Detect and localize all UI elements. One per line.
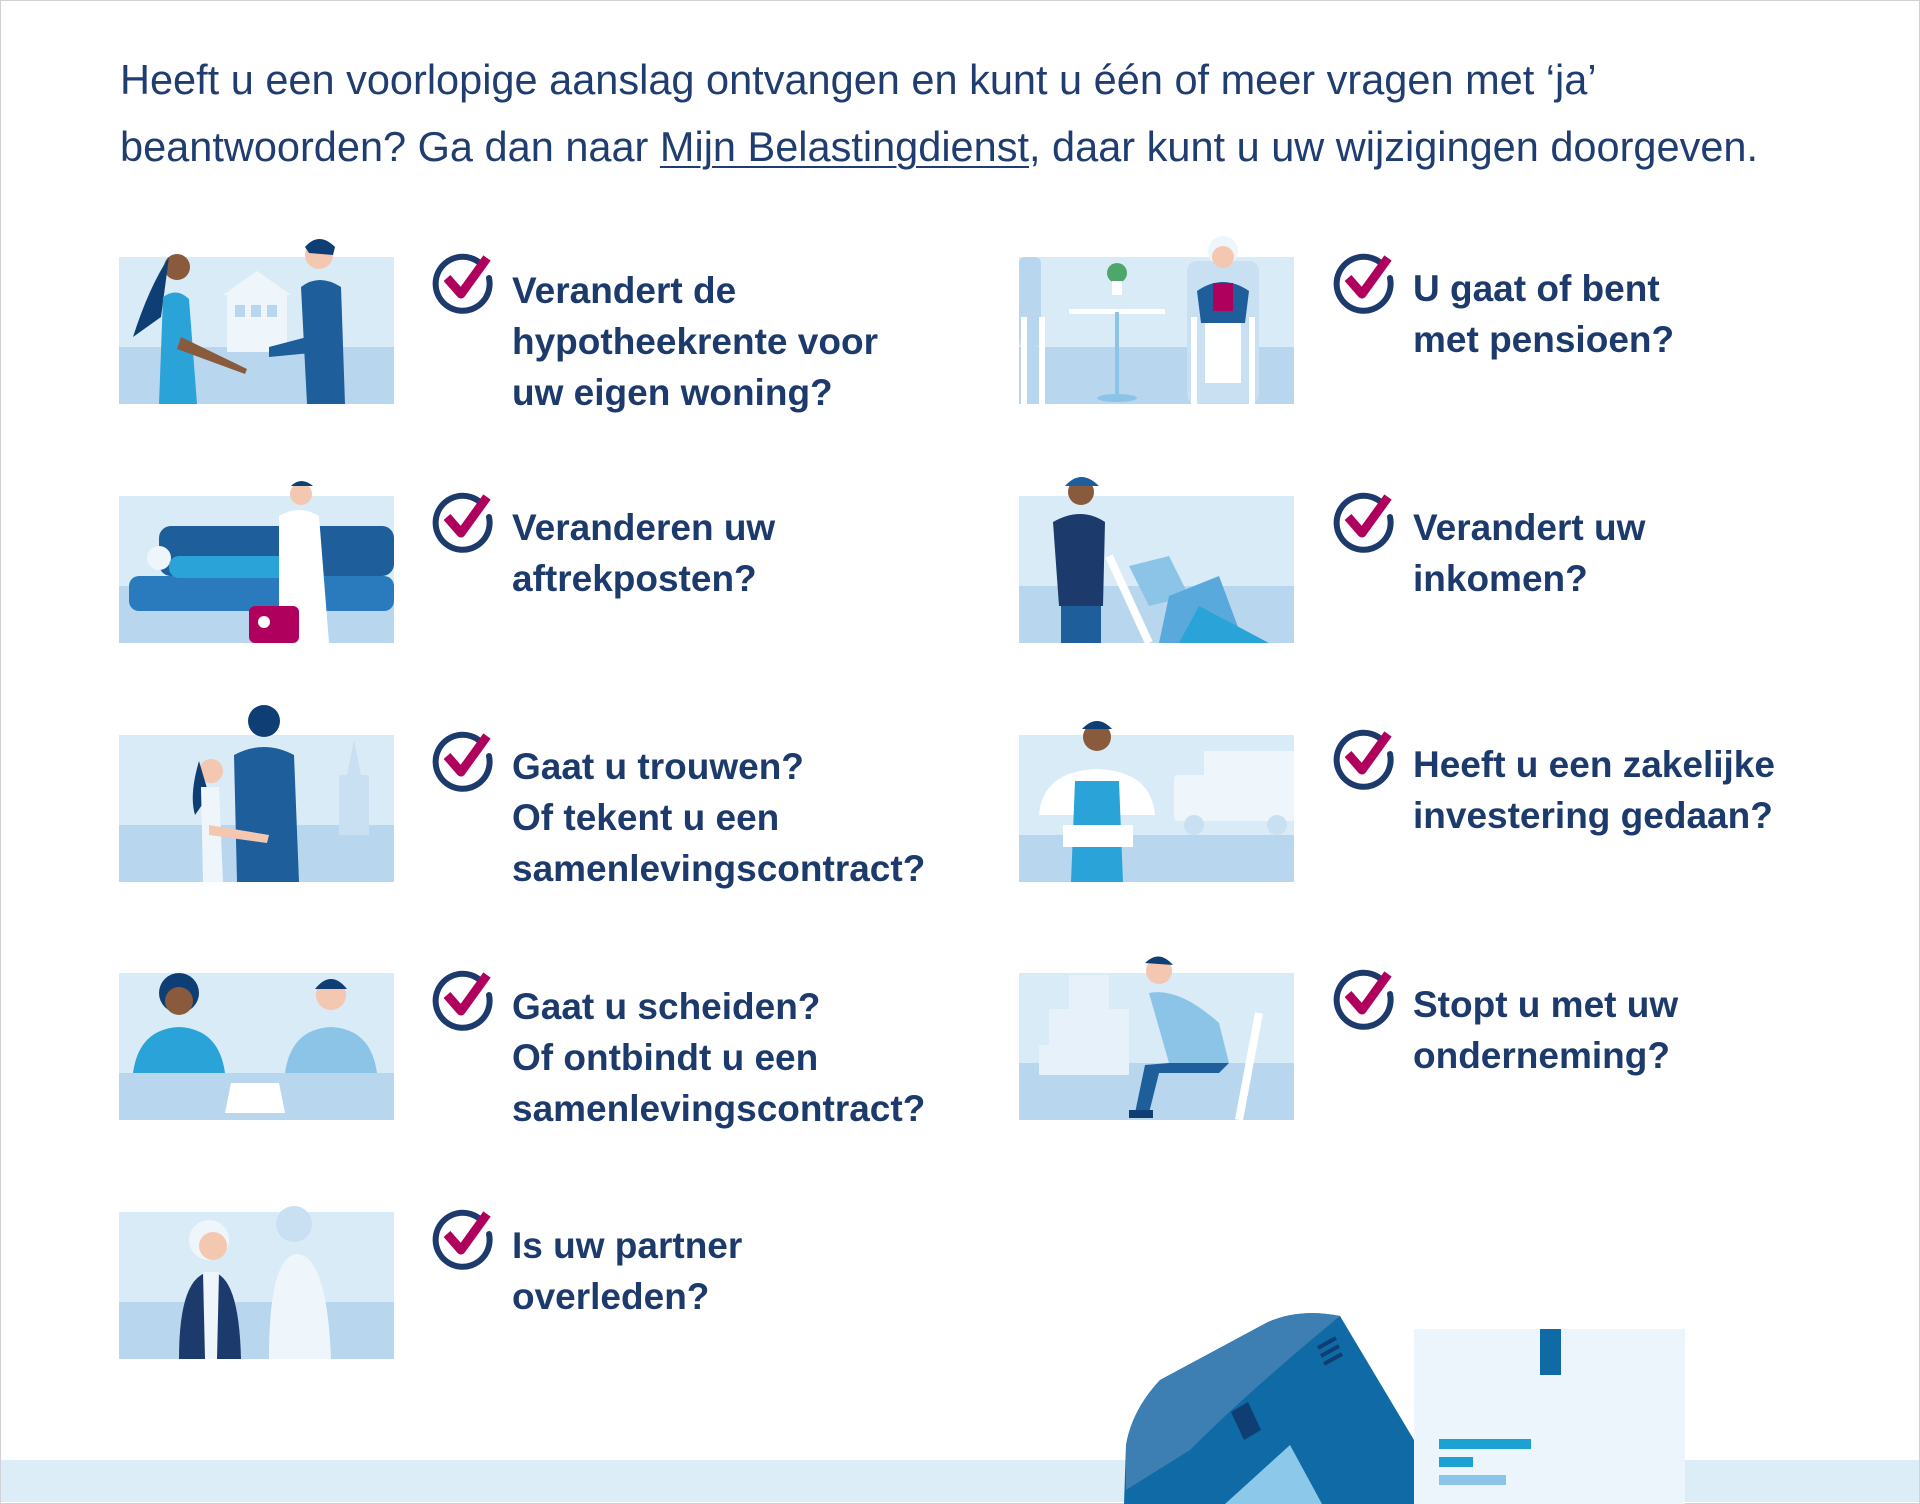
check icon 7: [1334, 492, 1394, 553]
check icon 5: [432, 1210, 493, 1270]
question 1: Verandert de: [512, 270, 736, 311]
intro text: Heeft u een voorlopige aanslag ontvangen en kunt u één of meer vragen met ‘ja’: [120, 56, 1597, 103]
question 9: Stopt u met uw: [1413, 984, 1678, 1025]
question 7: [1413, 507, 1646, 599]
illustration: delivery worker: [1019, 477, 1294, 643]
check icon 2: [432, 492, 493, 553]
question 7: Verandert uw: [1413, 507, 1645, 548]
question 9: onderneming?: [1413, 1035, 1670, 1076]
question 3: [512, 746, 925, 889]
question 4: samenlevingscontract?: [512, 1088, 925, 1129]
illustration: widow: [119, 1206, 394, 1359]
letter: [1414, 1329, 1685, 1504]
check icon 4: [432, 970, 493, 1031]
illustration: stopping business: [1019, 956, 1294, 1120]
question 6: U gaat of bent: [1413, 268, 1660, 309]
check icon 9: [1334, 970, 1394, 1030]
question 8: Heeft u een zakelijke: [1413, 744, 1775, 785]
illustration: wedding: [119, 705, 394, 882]
question 7: inkomen?: [1413, 558, 1588, 599]
question 5: overleden?: [512, 1276, 709, 1317]
question 6: met pensioen?: [1413, 319, 1674, 360]
check icon 1: [432, 254, 493, 314]
question 2: Veranderen uw: [512, 507, 775, 548]
question 4: [512, 986, 925, 1129]
check icon 6: [1334, 254, 1394, 314]
illustration: divorce: [119, 973, 394, 1120]
check icon 3: [432, 732, 493, 792]
question 5: Is uw partner: [512, 1225, 742, 1266]
question 5: [512, 1225, 742, 1317]
mailbox: [1124, 1313, 1414, 1504]
question 8: [1413, 744, 1775, 836]
question 1: hypotheekrente voor: [512, 321, 878, 362]
illustration: pension: [1019, 236, 1294, 404]
intro text: beantwoorden? Ga dan naar Mijn Belastingdienst, daar kunt u uw wijzigingen doorgeven.: [120, 123, 1758, 170]
question 2: [512, 507, 776, 599]
illustration: doctor: [119, 481, 394, 643]
question 9: [1413, 984, 1678, 1076]
check icon 8: [1334, 730, 1394, 790]
question 4: Of ontbindt u een: [512, 1037, 818, 1078]
question 3: samenlevingscontract?: [512, 848, 925, 889]
question 3: Gaat u trouwen?: [512, 746, 804, 787]
illustration: house handover: [119, 239, 394, 404]
question 4: Gaat u scheiden?: [512, 986, 820, 1027]
question 1: [512, 270, 878, 413]
question 1: uw eigen woning?: [512, 372, 833, 413]
question 8: investering gedaan?: [1413, 795, 1773, 836]
question 2: aftrekposten?: [512, 558, 757, 599]
bottom band with mailbox and letter: [1, 1313, 1919, 1504]
question 3: Of tekent u een: [512, 797, 779, 838]
question 6: [1413, 268, 1674, 360]
intro text: [120, 56, 1758, 170]
illustration: business investment: [1019, 721, 1294, 882]
